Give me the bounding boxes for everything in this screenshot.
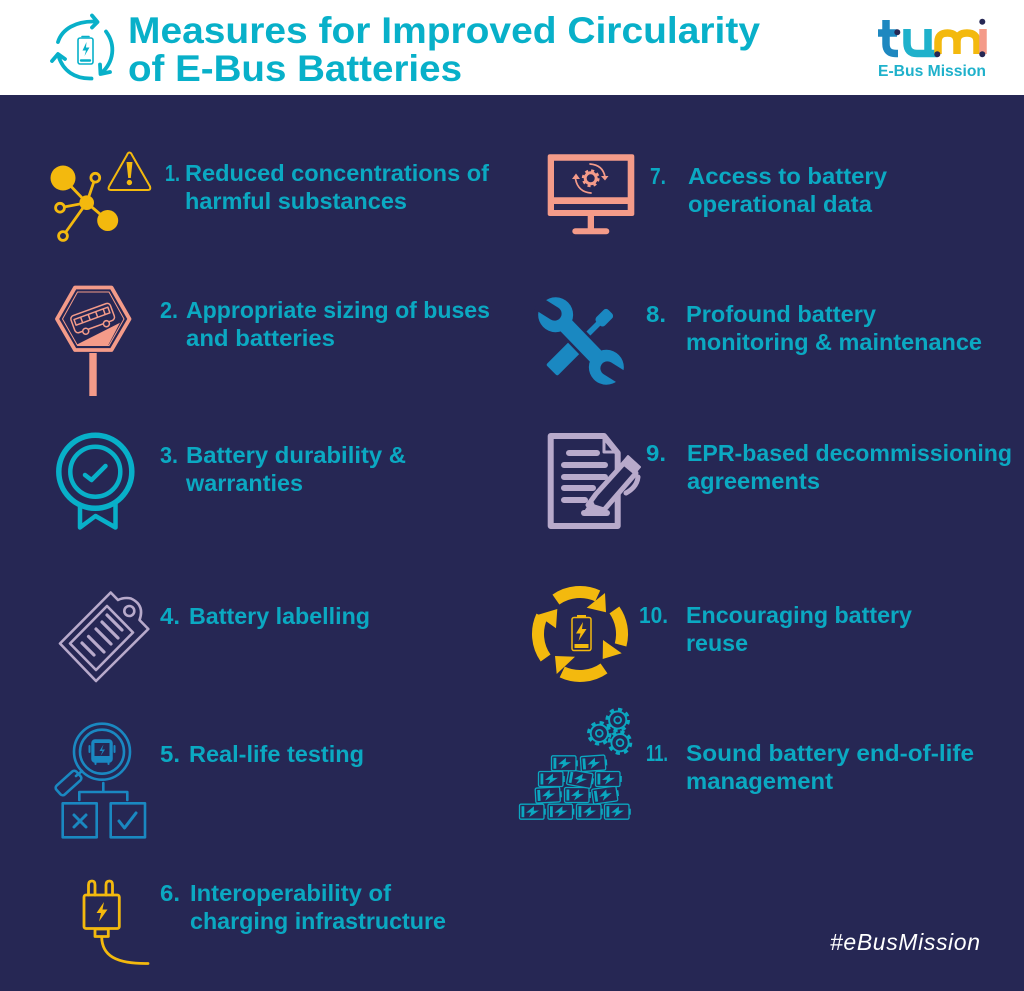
item 10 text: reuse	[686, 630, 748, 656]
item 4 text: 4.	[160, 603, 180, 629]
item 2 text: Appropriate sizing of buses	[186, 297, 490, 323]
item 9 text: EPR-based decommissioning	[687, 440, 1012, 466]
item 8 text	[646, 301, 982, 355]
icon: wrench and screwdriver	[527, 286, 635, 396]
item 4 text: Battery labelling	[189, 603, 370, 629]
item 7 text: 7.	[650, 163, 666, 189]
item 7 text: Access to battery	[688, 163, 887, 189]
title	[128, 10, 760, 89]
logo: tumi E-Bus Mission: E-Bus Mission	[878, 63, 986, 80]
icon: charging plug	[84, 881, 148, 964]
item 8 text: 8.	[646, 301, 666, 327]
header band	[0, 0, 1024, 95]
item 2 text: 2.	[160, 297, 178, 323]
icon: monitor with gear	[548, 154, 634, 234]
item 5 text: 5.	[160, 741, 180, 767]
item 10 text: 10.	[639, 602, 668, 628]
icon: circular battery arrows	[52, 16, 112, 79]
item 11 text: Sound battery end-of-life	[686, 740, 974, 766]
item 9 text: agreements	[687, 468, 820, 494]
hashtag: #eBusMission	[830, 929, 980, 955]
item 2 text	[160, 297, 490, 351]
item 1 text: 1.	[165, 160, 180, 186]
item 11 text: management	[686, 768, 833, 794]
item 3 text: Battery durability &	[186, 442, 406, 468]
item 9 text	[646, 440, 1012, 494]
icon: battery pile and gears	[520, 710, 631, 819]
item 6 text	[160, 880, 446, 934]
item 8 text: Profound battery	[686, 301, 876, 327]
icon: hexagon sign with bus on slope	[57, 288, 130, 396]
item 6 text: 6.	[160, 880, 180, 906]
item 5 text: Real-life testing	[189, 741, 364, 767]
item 3 text: warranties	[185, 470, 303, 496]
item 7 text	[650, 163, 887, 217]
item 1 text: Reduced concentrations of	[185, 160, 489, 186]
item 3 text	[160, 442, 406, 496]
item 3 text: 3.	[160, 442, 178, 468]
item 2 text: and batteries	[186, 325, 335, 351]
title: Measures for Improved Circularity	[128, 10, 760, 51]
icon: reuse arrows with battery	[537, 592, 622, 676]
item 1 text	[165, 160, 489, 214]
logo: tumi E-Bus Mission	[878, 19, 986, 80]
item 11 text	[646, 740, 974, 794]
item 6 text: charging infrastructure	[190, 908, 446, 934]
icon: magnifier with bus and test results	[54, 724, 145, 837]
item 9 text: 9.	[646, 440, 666, 466]
icon: warranty rosette	[59, 435, 132, 528]
item 1 text: harmful substances	[185, 188, 407, 214]
icon: document with pen	[551, 436, 640, 526]
item 6 text: Interoperability of	[190, 880, 391, 906]
icon: harmful substances molecule and warning	[50, 152, 150, 240]
item 11 text: 11.	[646, 740, 668, 766]
item 10 text: Encouraging battery	[686, 602, 912, 628]
icon: battery label tag	[60, 592, 148, 681]
item 7 text: operational data	[688, 191, 872, 217]
item 10 text	[639, 602, 912, 656]
title: of E-Bus Batteries	[128, 48, 462, 89]
item 8 text: monitoring & maintenance	[686, 329, 982, 355]
